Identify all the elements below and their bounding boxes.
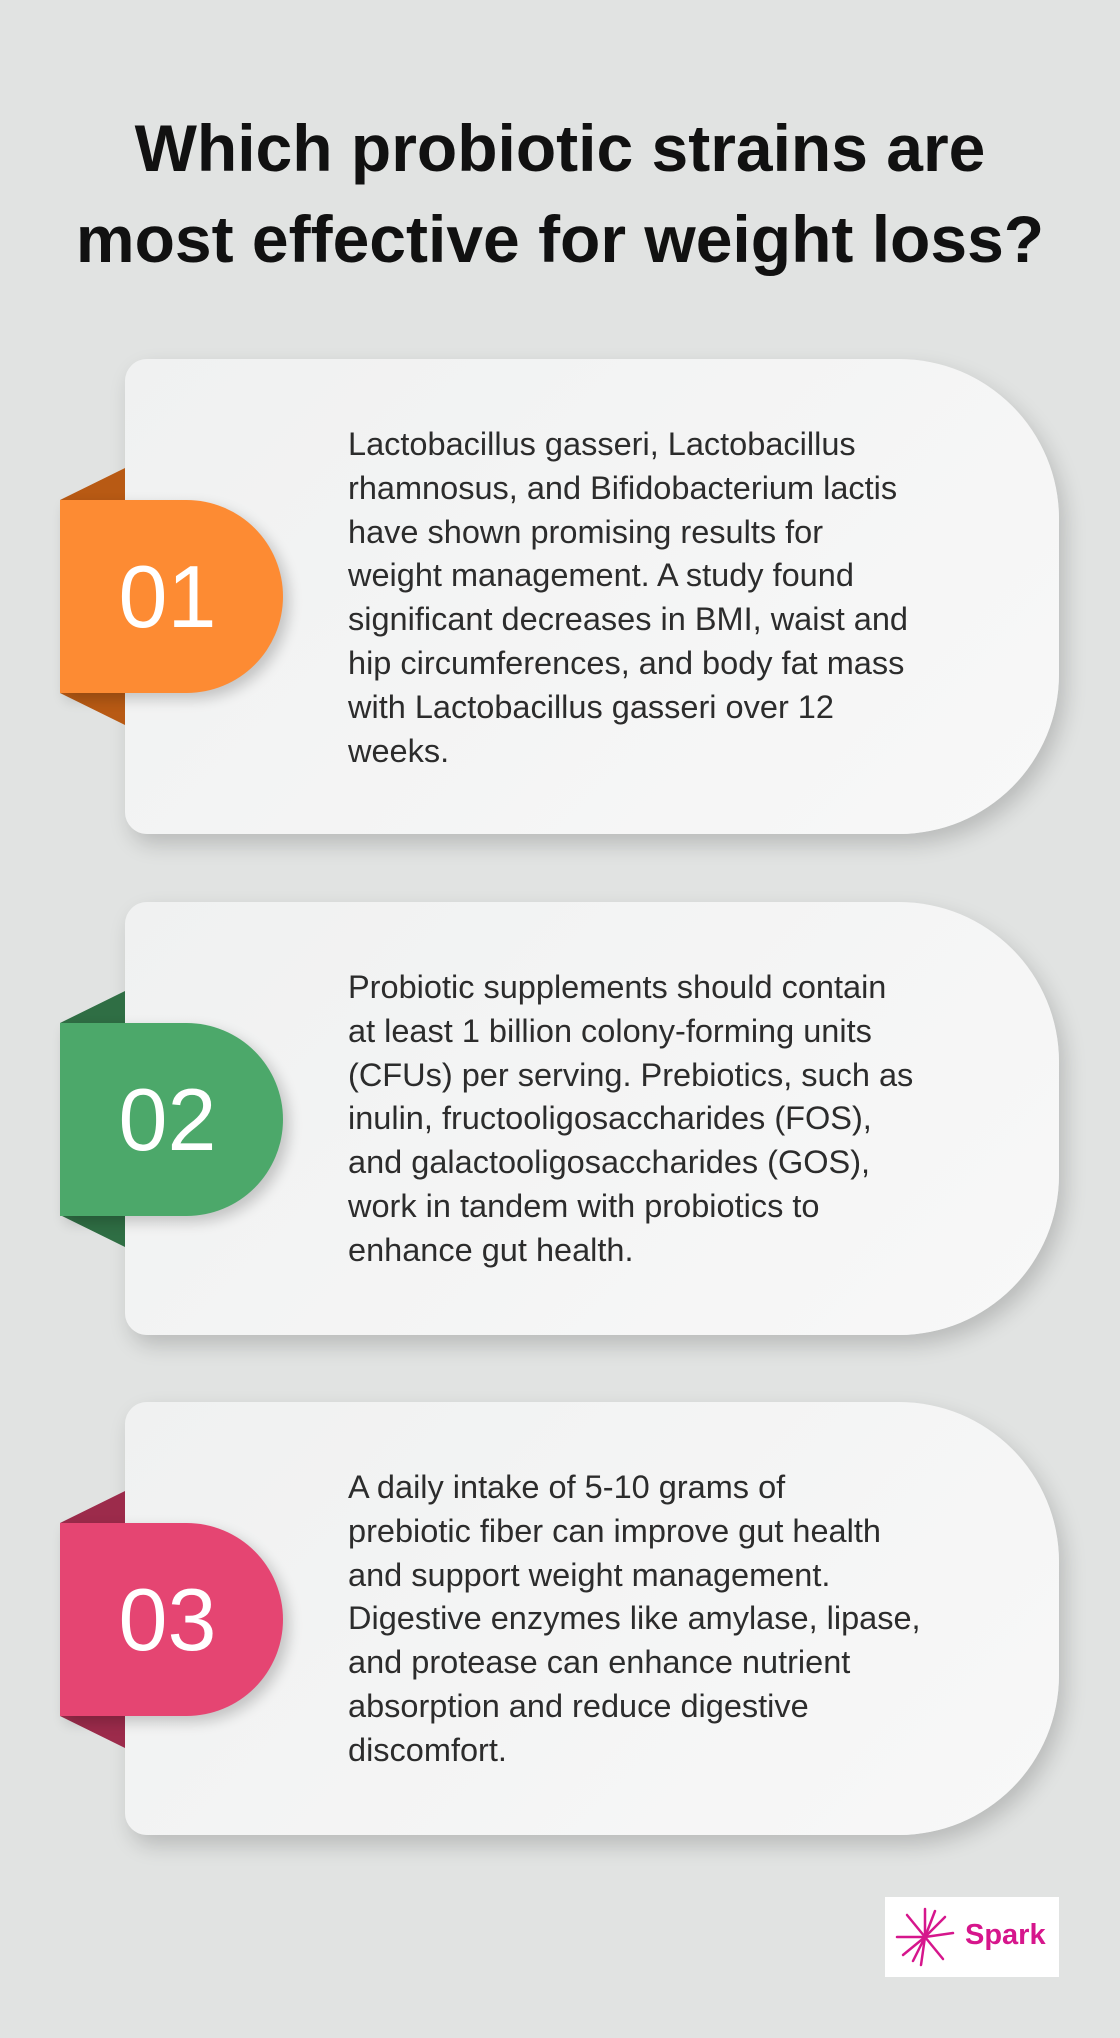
fold 3 top	[60, 1491, 125, 1523]
card 2	[125, 902, 1059, 1335]
card 3	[125, 1402, 1059, 1835]
tab 01: 01	[119, 547, 216, 646]
fold 3 bottom	[60, 1716, 125, 1748]
title: Which probiotic strains are	[135, 111, 985, 185]
text 3	[348, 1469, 921, 1768]
fold 1 top	[60, 468, 125, 500]
icon: spark	[896, 1908, 954, 1966]
text 3: Digestive enzymes like amylase, lipase,	[348, 1600, 921, 1636]
tab 02	[60, 1023, 283, 1216]
text 1: significant decreases in BMI, waist and	[348, 601, 908, 637]
text 1: hip circumferences, and body fat mass	[348, 645, 904, 681]
text 3: discomfort.	[348, 1732, 507, 1768]
text 1	[348, 426, 908, 769]
logo text: Spark	[965, 1919, 1046, 1951]
text 1: rhamnosus, and Bifidobacterium lactis	[348, 470, 897, 506]
fold 1 bottom	[60, 693, 125, 725]
text 2: and galactooligosaccharides (GOS),	[348, 1144, 870, 1180]
text 1: Lactobacillus gasseri, Lactobacillus	[348, 426, 856, 462]
text 3: prebiotic fiber can improve gut health	[348, 1513, 881, 1549]
text 2: at least 1 billion colony-forming units	[348, 1013, 872, 1049]
text 2	[348, 969, 913, 1268]
text 1: weeks.	[348, 733, 449, 769]
text 1: weight management. A study found	[348, 557, 854, 593]
fold 2 bottom	[62, 1216, 125, 1247]
text 3: and protease can enhance nutrient	[348, 1644, 850, 1680]
card 1	[125, 359, 1059, 834]
tab 03	[60, 1523, 283, 1716]
text 1: have shown promising results for	[348, 514, 823, 550]
text 2: work in tandem with probiotics to	[348, 1188, 819, 1224]
text 3: and support weight management.	[348, 1557, 830, 1593]
text 3: absorption and reduce digestive	[348, 1688, 809, 1724]
text 1: with Lactobacillus gasseri over 12	[348, 689, 834, 725]
tab 02: 02	[119, 1070, 216, 1169]
text 2: enhance gut health.	[348, 1232, 634, 1268]
title: most effective for weight loss?	[76, 202, 1044, 276]
logo	[885, 1897, 1059, 1977]
text 2: (CFUs) per serving. Prebiotics, such as	[348, 1057, 913, 1093]
text 2: Probiotic supplements should contain	[348, 969, 886, 1005]
title	[76, 111, 1044, 276]
fold 2 top	[60, 991, 125, 1023]
tab 03: 03	[119, 1570, 216, 1669]
tab 01	[60, 500, 283, 693]
text 2: inulin, fructooligosaccharides (FOS),	[348, 1100, 872, 1136]
text 3: A daily intake of 5-10 grams of	[348, 1469, 785, 1505]
